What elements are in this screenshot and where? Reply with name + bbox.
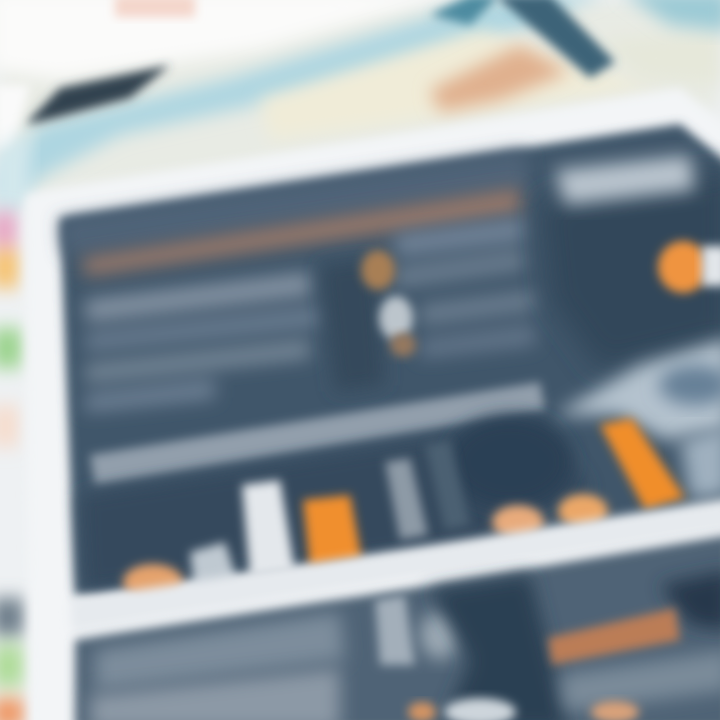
lower dark block <box>430 575 570 720</box>
bottom orange spots <box>408 702 436 720</box>
vertical dark column <box>320 258 385 392</box>
teal map band <box>0 0 610 210</box>
left text block <box>85 272 320 412</box>
bar chart <box>123 440 470 600</box>
bottom white spot <box>444 698 516 720</box>
middle white dot <box>379 296 413 340</box>
middle orange dot <box>361 250 395 290</box>
small orange pills <box>492 505 544 539</box>
right orange dot <box>658 241 708 293</box>
white wedge left <box>0 85 30 150</box>
orange map patch <box>430 45 570 112</box>
middle text block <box>395 218 535 358</box>
orange heading bar <box>82 188 522 276</box>
right title <box>555 155 695 205</box>
lower chart dark area <box>80 420 590 590</box>
top right teal <box>620 0 720 32</box>
lower right dark <box>660 570 720 630</box>
dark wedge top left <box>25 65 170 125</box>
lower white mark <box>375 595 415 665</box>
lower orange bar <box>548 608 680 665</box>
pink top note <box>115 0 195 17</box>
header dark band <box>60 150 530 255</box>
lower right text <box>560 650 720 712</box>
right white tab <box>702 246 720 286</box>
long divider bar <box>90 382 545 485</box>
white divider shelf <box>70 498 720 632</box>
panel: lower dashboard <box>75 535 720 720</box>
right gauge <box>555 338 720 510</box>
right dark region <box>540 170 720 370</box>
top right cream area <box>600 30 720 85</box>
dark teal diagonal <box>495 0 615 78</box>
left colour tabs <box>0 212 24 720</box>
middle small orange dot <box>390 333 416 357</box>
panel: main dashboard <box>60 124 720 600</box>
dark circle <box>448 416 572 508</box>
blue wash <box>0 130 30 225</box>
top left white paper <box>0 0 470 80</box>
cream map area <box>260 30 660 140</box>
teal top ribbon <box>430 0 500 25</box>
